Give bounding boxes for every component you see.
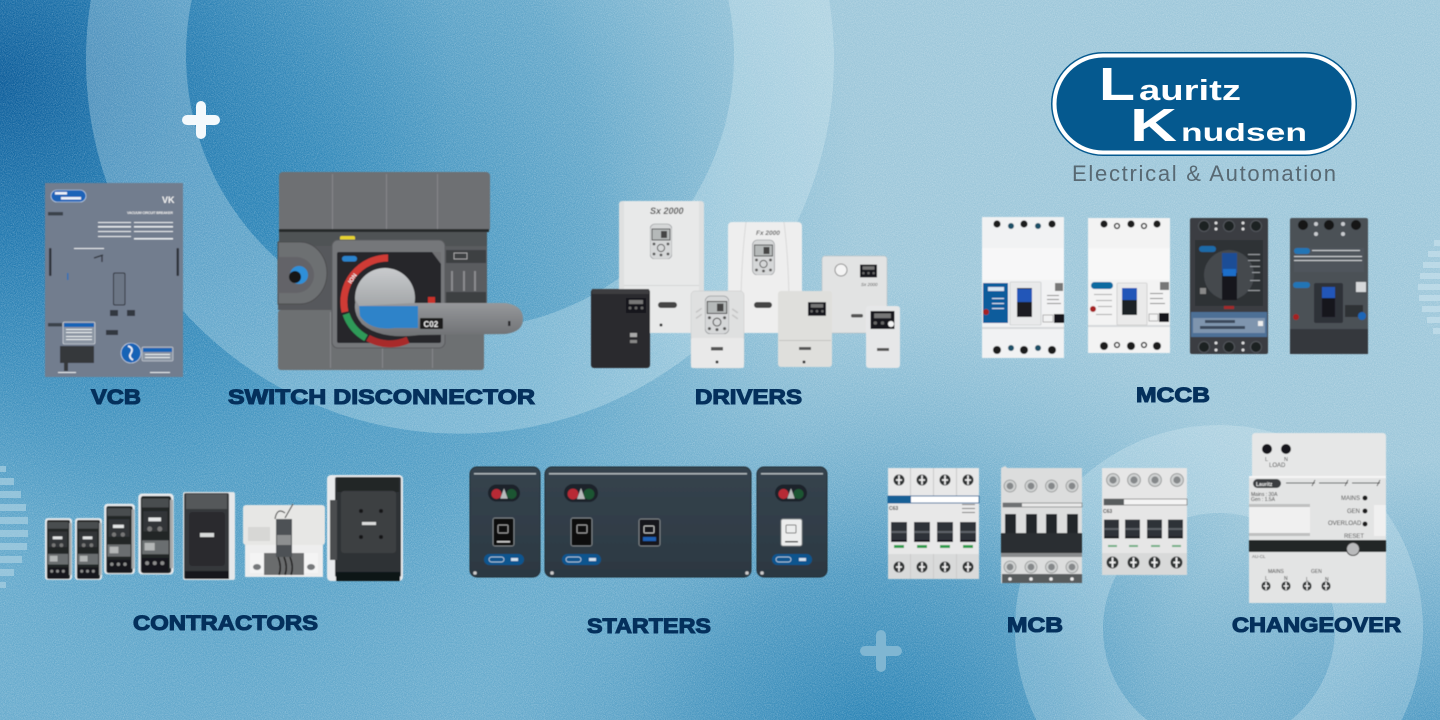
product: starters bbox=[470, 467, 827, 577]
drive: Sx 2000 large bbox=[619, 201, 704, 333]
drive: Fx 2000: Fx 2000 bbox=[756, 230, 780, 237]
decor: right hatched half circle bbox=[1418, 240, 1440, 334]
breaker: MCB right bbox=[1102, 468, 1187, 575]
product: changeover: OVERLOAD bbox=[1328, 521, 1362, 527]
breaker: MCB left: C63 bbox=[889, 506, 898, 512]
contactor: white with relay bbox=[243, 504, 325, 577]
product: changeover: RESET bbox=[1344, 534, 1364, 540]
product: changeover: N bbox=[1325, 577, 1329, 583]
product: changeover: GEN bbox=[1347, 509, 1360, 515]
logo: Lauritz Knudsen: nudsen bbox=[1181, 119, 1307, 147]
drive: small right unit bbox=[866, 306, 900, 368]
logo: Lauritz Knudsen: auritz bbox=[1139, 75, 1241, 107]
contactor: largest bbox=[327, 475, 403, 581]
label: drivers: DRIVERS bbox=[695, 386, 802, 409]
product: changeover: Mains : 30A bbox=[1251, 492, 1278, 498]
product: drivers bbox=[591, 201, 900, 368]
drive: Sx 2000 wall unit: Sx 2000 bbox=[861, 282, 878, 287]
drive: Sx 2000 large: Sx 2000 bbox=[650, 206, 684, 216]
label: changeover: CHANGEOVER bbox=[1232, 614, 1401, 637]
product: switch disconnector: ION bbox=[348, 273, 359, 285]
starter: left box bbox=[470, 467, 540, 577]
product: changeover: Lauritz bbox=[1256, 482, 1273, 488]
product: changeover: N bbox=[1284, 457, 1288, 463]
label: contractors: CONTRACTORS bbox=[133, 612, 318, 635]
label: MCCB: MCCB bbox=[1136, 384, 1210, 407]
product: changeover: Gen : 1.5A bbox=[1251, 497, 1276, 503]
product: changeover: MAINS bbox=[1268, 569, 1284, 575]
breaker: dark with rotary dial bbox=[1190, 218, 1268, 354]
breaker: white with white label bbox=[1088, 218, 1170, 353]
ring: large translucent arc bbox=[86, 0, 834, 434]
logo: Lauritz Knudsen: L bbox=[1099, 58, 1135, 110]
product: changeover: LOAD bbox=[1269, 463, 1286, 469]
product: changeover: L bbox=[1265, 576, 1268, 582]
drive: mid white unit bbox=[778, 291, 832, 367]
product: switch disconnector bbox=[278, 172, 523, 370]
tagline: Electrical & Automation bbox=[1072, 161, 1336, 186]
logo: Lauritz Knudsen bbox=[1051, 52, 1357, 156]
product: changeover: L bbox=[1306, 577, 1309, 583]
breaker: MCB right: C63 bbox=[1103, 509, 1112, 515]
product: VCB: VACUUM CIRCUIT BREAKER bbox=[127, 211, 173, 215]
icon: plus top left bbox=[182, 101, 220, 139]
product: changeover: L bbox=[1265, 457, 1268, 463]
label: VCB: VCB bbox=[91, 386, 141, 409]
product: changeover: AU-CL bbox=[1252, 554, 1266, 559]
drive: small white unit with keypad bbox=[691, 291, 744, 368]
label: switch disconnector: SWITCH DISCONNECTOR bbox=[228, 386, 535, 409]
product: switch disconnector: C02 bbox=[424, 320, 439, 329]
drive: Sx 2000 wall unit bbox=[822, 256, 887, 333]
starter: wide box bbox=[545, 467, 751, 577]
product: contactors bbox=[45, 475, 403, 581]
product: changeover: GEN bbox=[1311, 569, 1322, 575]
breaker: white with blue label bbox=[982, 217, 1064, 358]
product: VCB bbox=[45, 183, 183, 377]
product: VCB: VK bbox=[162, 195, 175, 205]
breaker: MCB left bbox=[888, 468, 979, 579]
logo: Lauritz Knudsen: K bbox=[1130, 99, 1177, 151]
decor: left hatched half circle bbox=[0, 466, 28, 588]
ring: lower right translucent arc bbox=[1015, 425, 1423, 720]
starter: right box bbox=[757, 467, 827, 577]
contactor: large black bbox=[183, 492, 235, 580]
drive: Fx 2000 bbox=[728, 222, 802, 333]
product: changeover: N bbox=[1284, 576, 1288, 582]
label: MCB: MCB bbox=[1007, 614, 1063, 637]
product: changeover: MAINS bbox=[1341, 496, 1360, 502]
drive: black unit bbox=[591, 289, 650, 368]
product: MCCB bbox=[982, 217, 1368, 358]
breaker: MCB centre bbox=[1001, 466, 1082, 583]
breaker: grey with toggle bbox=[1290, 218, 1368, 354]
product: changeover bbox=[1249, 433, 1386, 603]
label: starters: STARTERS bbox=[587, 615, 711, 638]
icon: plus bottom bbox=[860, 630, 902, 672]
product: MCB bbox=[888, 466, 1187, 583]
